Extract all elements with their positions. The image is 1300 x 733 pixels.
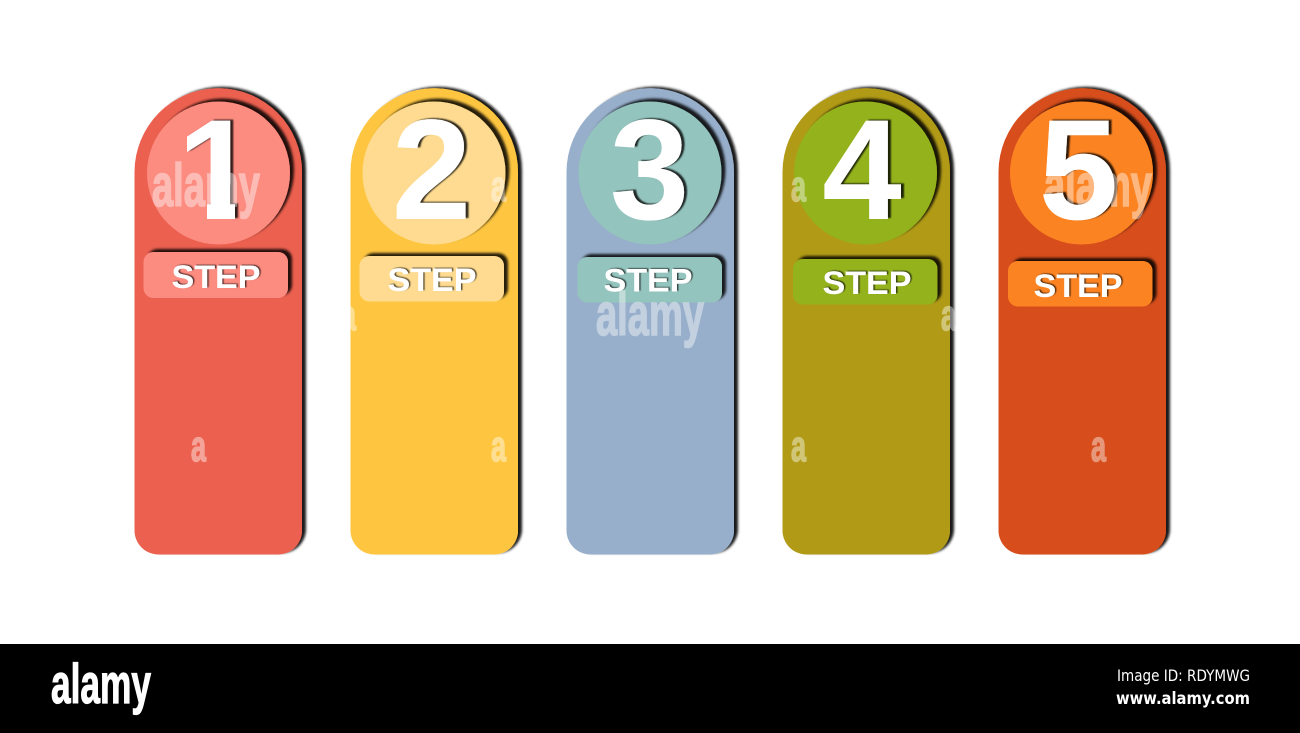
- number 2: 2: [392, 91, 471, 250]
- panel: step 3: [566, 88, 734, 554]
- step label 3: STEP: [604, 262, 692, 298]
- card 1: [134, 88, 302, 555]
- footer bar: [0, 644, 1300, 733]
- watermarks: alamy: [1044, 152, 1152, 219]
- card 4: [782, 88, 950, 554]
- image id: Image ID: RDYMWG: [1117, 666, 1250, 685]
- watermarks: alamy: [152, 152, 260, 219]
- step label 5: STEP: [1034, 268, 1122, 304]
- watermarks: a: [491, 162, 506, 211]
- step label 4: STEP: [822, 265, 912, 301]
- step label 1: STEP: [172, 259, 260, 295]
- watermarks: a: [491, 422, 506, 471]
- step label 2: STEP: [388, 262, 476, 298]
- panel: step 5: [998, 88, 1166, 554]
- card 2: [350, 88, 518, 554]
- watermarks: alamy: [596, 281, 704, 348]
- number circle 4: [794, 102, 937, 244]
- number circle 1: [147, 102, 290, 244]
- footer logo: alamy: [51, 652, 151, 715]
- number 4: 4: [822, 91, 902, 250]
- number circle 2: [362, 102, 506, 244]
- panel: step 2: [350, 88, 518, 554]
- number 5: 5: [1039, 91, 1118, 250]
- number 3: 3: [610, 91, 689, 250]
- panel: step 1: [134, 88, 302, 555]
- number circle 5: [1010, 102, 1153, 244]
- card 3: [566, 88, 734, 554]
- watermarks: a: [1091, 422, 1106, 471]
- number 1: 1: [177, 91, 257, 250]
- card 5: [998, 88, 1166, 554]
- number circle 3: [578, 102, 722, 244]
- step label 5: [1008, 261, 1152, 306]
- step label 4: [793, 259, 938, 304]
- website: www.alamy.com: [1116, 689, 1250, 709]
- watermarks: a: [341, 291, 356, 340]
- watermarks: a: [941, 291, 956, 340]
- watermarks: [152, 152, 1152, 471]
- step label 3: [578, 257, 722, 302]
- panel: step 4: [782, 88, 950, 554]
- watermarks: a: [191, 422, 206, 471]
- step label 2: [360, 256, 504, 302]
- step label 1: [144, 252, 288, 298]
- watermarks: a: [791, 162, 806, 211]
- watermarks: a: [791, 422, 806, 471]
